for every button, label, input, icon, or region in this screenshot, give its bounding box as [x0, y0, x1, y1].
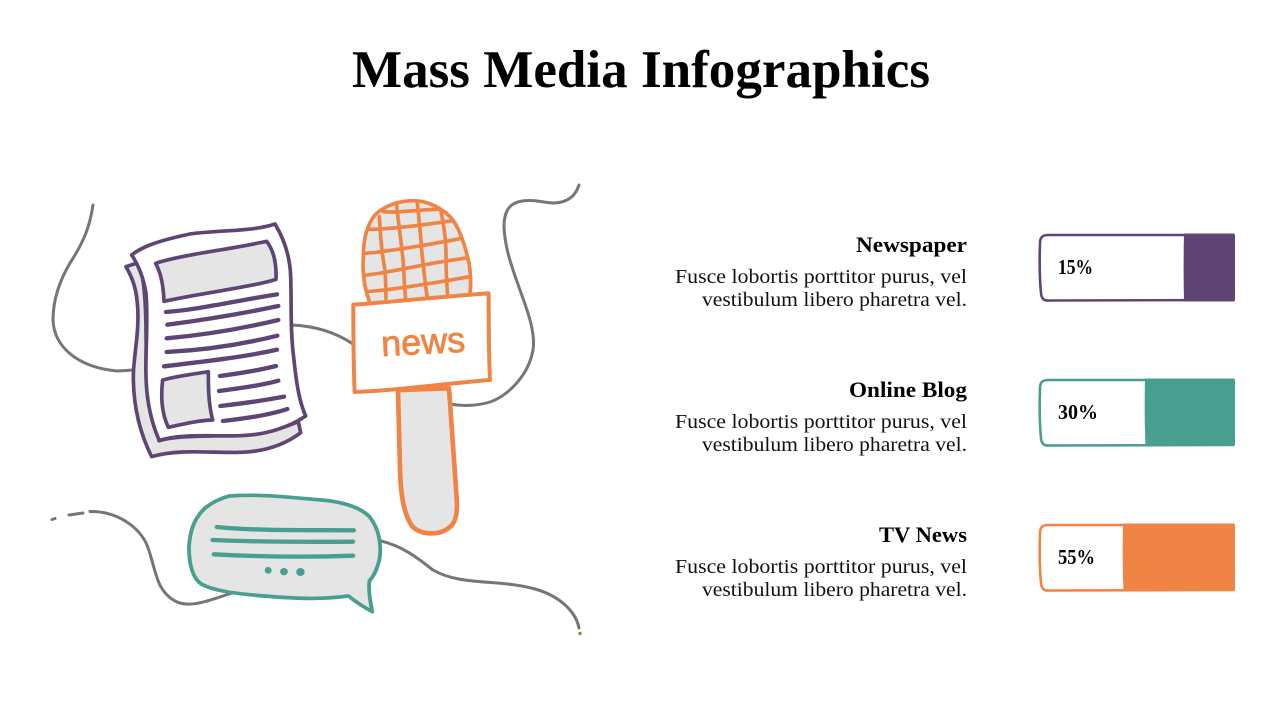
- back sheet: [126, 263, 301, 457]
- description: Fusce lobortis porttitor purus, vel: [675, 556, 967, 578]
- news sign: [353, 293, 490, 392]
- row: tv news: [675, 522, 1235, 601]
- progress bar 15%: 15%: [1058, 255, 1093, 279]
- progress bar 30%: [1040, 378, 1235, 446]
- description: Fusce lobortis porttitor purus, vel: [675, 411, 967, 433]
- description: Fusce lobortis porttitor purus, vel: [675, 266, 967, 288]
- connector line: speech bubble to bottom right: [381, 541, 582, 635]
- bubble outline: [189, 495, 380, 612]
- title: Mass Media Infographics: [352, 41, 930, 99]
- icon: newspaper: [126, 224, 306, 457]
- row: newspaper: [675, 232, 1235, 311]
- row: online blog: [675, 377, 1235, 456]
- progress bar 15%: [1040, 234, 1235, 302]
- description: vestibulum libero pharetra vel.: [702, 434, 967, 456]
- text lines: [164, 294, 287, 421]
- progress bar 55%: [1040, 524, 1235, 591]
- microphone label: news: [380, 319, 466, 364]
- handle: [398, 388, 457, 533]
- illustration: mass media doodles: [52, 185, 582, 635]
- progress bar 30%: 30%: [1058, 400, 1098, 424]
- description: [675, 556, 967, 601]
- connector line: microphone to top right: [450, 185, 579, 405]
- heading: Newspaper: [856, 232, 967, 257]
- message lines: [213, 527, 354, 557]
- description: vestibulum libero pharetra vel.: [702, 289, 967, 311]
- icon: microphone: [353, 201, 490, 533]
- headline image box: [156, 241, 276, 301]
- small image box: [162, 372, 213, 427]
- grille mesh: [364, 203, 469, 301]
- progress bar 55%: 55%: [1058, 545, 1095, 569]
- icon: speech bubble: [189, 495, 380, 612]
- heading: Online Blog: [849, 377, 967, 402]
- description: [675, 266, 967, 311]
- front sheet: [132, 224, 306, 441]
- connector line: newspaper to microphone: [292, 325, 353, 344]
- connector line: top left to newspaper: [53, 205, 134, 371]
- grille head: [363, 201, 471, 303]
- typing dots: [265, 567, 305, 576]
- heading: TV News: [879, 522, 967, 547]
- description: vestibulum libero pharetra vel.: [702, 579, 967, 601]
- connector line: left dashes to speech bubble: [52, 511, 232, 604]
- description: [675, 411, 967, 456]
